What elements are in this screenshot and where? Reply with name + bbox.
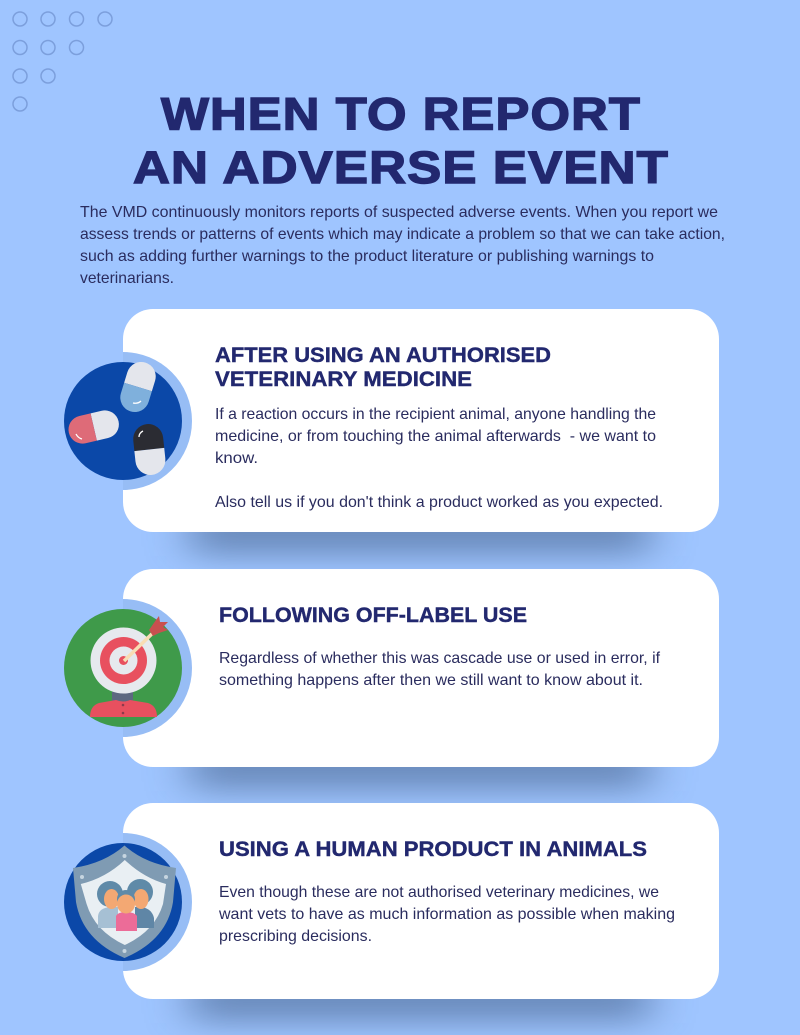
text: human product: prescribing decisions. [219, 928, 372, 945]
intro text: The VMD continuously monitors reports of suspected adverse events. When you report we [80, 204, 718, 221]
heading: off-label: FOLLOWING OFF-LABEL USE [219, 604, 527, 627]
text: after using: Also tell us if you don't think a product worked as you expected. [215, 494, 663, 511]
intro text: such as adding further warnings to the product literature or publishing warnings to [80, 248, 654, 265]
panel: after using an authorised veterinary medicine [64, 309, 719, 556]
heading: after using: VETERINARY MEDICINE [215, 368, 472, 391]
icon: capsules [64, 352, 192, 490]
title: AN ADVERSE EVENT [133, 142, 669, 193]
text: off-label: something happens after then we still want to know about it. [219, 672, 643, 689]
text: off-label [219, 650, 661, 689]
text: human product: want vets to have as much information as possible when making [218, 906, 675, 923]
title [133, 88, 669, 193]
text: off-label: Regardless of whether this was cascade use or used in error, if [219, 650, 661, 667]
icon: target and arrow [64, 599, 192, 737]
text: after using [215, 406, 663, 511]
intro text: assess trends or patterns of events which may indicate a problem so that we can take action, [80, 226, 725, 243]
intro text [80, 204, 725, 287]
panel: following off-label use [64, 569, 719, 791]
text: after using: know. [215, 450, 258, 467]
text: human product [218, 884, 675, 945]
icon: shield with family [64, 833, 192, 971]
heading: human product: USING A HUMAN PRODUCT IN ANIMALS [219, 838, 647, 861]
heading: after using [215, 344, 551, 391]
text: after using: If a reaction occurs in the recipient animal, anyone handling the [215, 406, 656, 423]
panel: using a human product in animals [64, 803, 719, 1023]
title: WHEN TO REPORT [161, 88, 641, 140]
text: human product: Even though these are not authorised veterinary medicines, we [219, 884, 659, 901]
intro text: veterinarians. [80, 270, 174, 287]
heading: after using: AFTER USING AN AUTHORISED [215, 344, 551, 367]
decorative dots [13, 12, 112, 111]
text: after using: medicine, or from touching the animal afterwards - we want to [215, 428, 656, 445]
